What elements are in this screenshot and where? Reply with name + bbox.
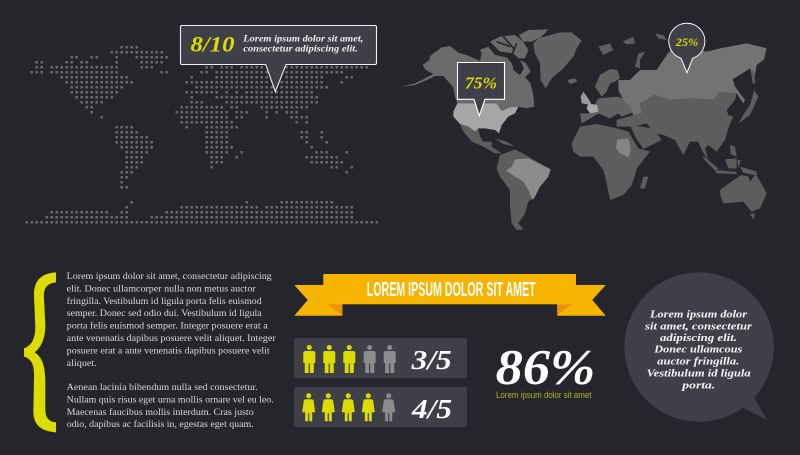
bubble text: adipiscing elit.	[660, 333, 737, 344]
solid world map	[400, 29, 767, 230]
dotted world map	[25, 47, 380, 222]
arctic islands	[490, 29, 548, 58]
paragraph 1: ante venenatis dapibus posuere velit aliquet. Integer	[67, 333, 276, 344]
male icons	[303, 345, 396, 373]
panel: men 3/5	[294, 338, 467, 378]
callout: 8/10	[180, 26, 376, 92]
panel background	[294, 387, 467, 427]
panel: women 4/5	[294, 387, 467, 427]
bubble shape	[624, 272, 774, 422]
paragraph 1: aliquet.	[67, 358, 97, 369]
africa	[572, 124, 650, 200]
callout: 75%	[458, 62, 504, 116]
ribbon main band	[323, 274, 576, 304]
paragraph 2: Nullam quis risus eget urna mollis ornare vel eu leo.	[67, 394, 274, 405]
callout shape	[458, 62, 504, 116]
paragraph 2: Aenean lacinia bibendum nulla sed consectetur.	[67, 382, 258, 393]
bubble text: Donec ullamcous	[653, 345, 742, 356]
madagascar	[640, 177, 648, 188]
indonesia and philippines	[702, 145, 757, 176]
callout text: Lorem ipsum dolor sit amet,	[242, 34, 363, 45]
callout text: consectetur adipiscing elit.	[243, 44, 358, 55]
iceland	[567, 78, 577, 84]
china, middle east and south asia	[617, 92, 737, 160]
yellow curly brace	[24, 272, 56, 432]
ribbon title: LOREM IPSUM DOLOR SIT AMET	[367, 278, 536, 301]
paragraph 1: elit. Donec ullamcorper nulla non metus auctor	[67, 283, 256, 294]
pin: 25%	[669, 23, 705, 73]
bubble text: sit amet, consectetur	[644, 321, 753, 332]
paragraph 1	[67, 271, 276, 369]
ribbon banner	[294, 274, 606, 316]
united states	[453, 103, 518, 133]
paragraph 2: odio, dapibus ac facilisis in, egestas eget quam.	[67, 419, 254, 430]
bubble text: porta.	[681, 380, 715, 391]
paragraph 1: porta felis euismod semper. Integer posuere erat a	[67, 321, 268, 332]
brazil	[506, 158, 551, 200]
bubble text: Lorem ipsum dolor	[649, 310, 748, 321]
arabia	[630, 125, 662, 149]
sudan	[616, 138, 631, 157]
paragraph 2	[67, 382, 274, 430]
fraction 3/5: 3/5	[411, 345, 452, 375]
cuba	[495, 138, 515, 147]
europe	[580, 97, 635, 123]
paragraph 2: Maecenas faucibus mollis interdum. Cras justo	[67, 407, 254, 418]
paragraph 1: Lorem ipsum dolor sit amet, consectetur adipiscing	[67, 271, 272, 282]
japan	[738, 90, 758, 123]
ribbon left fold	[327, 304, 342, 315]
south america	[497, 149, 551, 230]
scandinavia	[595, 69, 620, 97]
ribbon left tail	[294, 285, 342, 316]
female icons	[302, 393, 395, 421]
body text	[67, 271, 276, 430]
panel background	[294, 338, 467, 378]
fraction 4/5: 4/5	[411, 394, 452, 424]
canada and alaska	[400, 46, 534, 111]
ribbon right tail	[557, 285, 606, 316]
callout value: 8/10	[190, 32, 234, 56]
big stat: 86%	[496, 338, 595, 400]
tasmania	[750, 213, 755, 219]
arctic channels	[497, 37, 518, 70]
bubble text: auctor fringilla.	[657, 357, 739, 368]
stat caption: Lorem ipsum dolor sit amet	[496, 390, 592, 400]
bubble text: Vestibulum id ligula	[647, 368, 752, 379]
sakhalin	[751, 71, 755, 83]
france	[587, 103, 598, 113]
callout text	[242, 34, 363, 55]
polar islands	[598, 33, 667, 68]
united kingdom	[581, 92, 592, 105]
stat value: 86%	[496, 338, 595, 394]
callout value: 75%	[465, 73, 497, 92]
pin value: 25%	[675, 37, 698, 49]
paragraph 1: fringilla. Vestibulum id ligula porta felis euismod	[67, 296, 262, 307]
greenland	[533, 32, 582, 88]
pin shape	[669, 23, 705, 73]
russia	[618, 43, 767, 115]
paragraph 1: semper. Donec sed odio dui. Vestibulum id ligula	[67, 308, 262, 319]
ribbon right fold	[557, 304, 572, 315]
mexico and central america	[460, 124, 502, 153]
australia	[720, 175, 767, 212]
bubble text	[644, 310, 753, 391]
callout shape	[180, 26, 376, 92]
speech bubble	[624, 272, 774, 422]
paragraph 1: posuere erat a ante venenatis dapibus posuere velit	[67, 345, 270, 356]
